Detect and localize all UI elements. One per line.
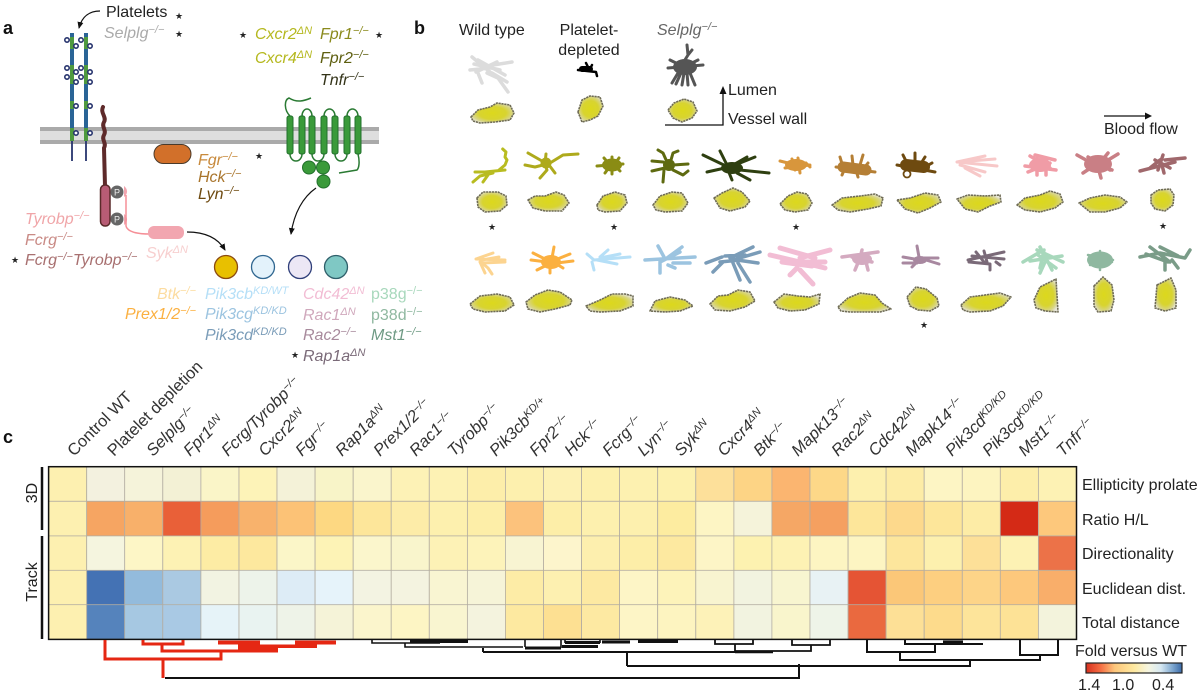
- Src family gene labels: −/−: [226, 168, 242, 180]
- column headings: Wild type: [459, 22, 525, 39]
- right row labels: Directionality: [1082, 546, 1174, 563]
- column labels: Pik3cb: [486, 412, 534, 460]
- row: total distance: [49, 605, 1076, 639]
- effector gene labels: Rac1: [303, 307, 340, 324]
- dendrogram: red cluster: [105, 640, 336, 678]
- Fc receptor gene labels: ★: [11, 256, 19, 266]
- column labels: Fpr2: [526, 423, 563, 460]
- column labels: Selplg: [143, 415, 188, 460]
- axes: lumen and vessel wall: Vessel wall: [728, 111, 807, 128]
- second row cell bodies: [477, 188, 1174, 213]
- Fc receptor gene labels: ΔN: [172, 244, 188, 256]
- colour legend: 1.0: [1112, 677, 1134, 694]
- column labels: Tnfr: [1053, 426, 1087, 460]
- GPCR gene labels: ★: [239, 31, 247, 41]
- column labels: −/−: [581, 415, 601, 435]
- GPCR gene labels: ΔN: [296, 49, 312, 61]
- column labels: −/−: [550, 411, 570, 432]
- column labels: Control WT: [64, 388, 136, 460]
- Selplg label: Selplg: [104, 25, 148, 42]
- effector gene labels: −/−: [407, 306, 422, 318]
- left group labels: 3D: [24, 483, 41, 503]
- effector gene labels: ΔN: [339, 306, 356, 318]
- GPCR gene labels: ★: [375, 31, 383, 41]
- column labels: Fcrg/Tyrobp: [218, 385, 293, 460]
- column labels: −/−: [622, 412, 643, 432]
- column labels: −/−: [310, 418, 330, 438]
- effector gene labels: −/−: [180, 305, 197, 317]
- column labels: −/−: [410, 395, 430, 415]
- column labels: −/−: [176, 403, 196, 423]
- third row cell bodies: [470, 277, 1176, 312]
- column labels: Lyn: [634, 428, 665, 460]
- receptor: Tyrobp / Fcrg chain: P: [114, 214, 120, 224]
- panel c label: c: [3, 427, 13, 447]
- significance stars: [488, 222, 1167, 331]
- column labels: ΔN: [285, 406, 305, 426]
- right row labels: [1082, 477, 1198, 632]
- column labels: Fcrg: [599, 424, 635, 460]
- column labels: Mapk13: [788, 406, 842, 460]
- Fc receptor gene labels: −/−: [74, 210, 90, 222]
- column labels: −/−: [1074, 415, 1094, 435]
- heat map grid: [49, 467, 1076, 639]
- effector gene labels: −/−: [406, 326, 422, 338]
- column labels: KD/KD: [1014, 388, 1046, 421]
- panel b label: b: [414, 18, 425, 38]
- right row labels: Ratio H/L: [1082, 512, 1149, 529]
- effector gene labels: Rac2: [303, 327, 340, 344]
- axes: lumen and vessel wall: [665, 82, 807, 128]
- column labels: Syk: [671, 428, 703, 460]
- GPCR gene labels: Cxcr2: [255, 26, 297, 43]
- GPCR gene labels: −/−: [353, 49, 369, 61]
- column labels: −/−: [433, 408, 453, 428]
- column labels: Fpr1: [180, 423, 217, 460]
- effector gene labels: Cdc42: [303, 286, 349, 303]
- Src family kinase: [154, 144, 191, 164]
- column labels: Rac1: [406, 420, 446, 460]
- GPCR gene labels: [239, 25, 383, 89]
- Fc receptor gene labels: Tyrobp: [73, 252, 122, 269]
- arrow: platelets: [79, 11, 100, 28]
- panel b: cell morphologies: [414, 18, 1190, 331]
- significance stars: ★: [1159, 222, 1167, 232]
- Fc receptor gene labels: −/−: [57, 251, 73, 263]
- row: directionality: [49, 536, 1076, 570]
- column labels: ΔN: [744, 406, 764, 426]
- Fc receptor gene labels: −/−: [122, 251, 138, 263]
- Src family gene labels: Lyn: [198, 186, 224, 203]
- column labels: ΔN: [203, 412, 223, 432]
- top row cell bodies: [471, 96, 697, 123]
- effector gene labels: Rap1a: [303, 348, 350, 365]
- arrow: Syk to effectors: [187, 232, 225, 250]
- column labels: Btk: [750, 430, 780, 460]
- column labels: KD/+: [521, 394, 548, 421]
- column headings: depleted: [558, 42, 620, 59]
- column labels: Rac2: [828, 420, 868, 460]
- colour legend: Fold versus WT: [1075, 643, 1187, 660]
- Src family gene labels: [198, 151, 263, 203]
- column labels: −/−: [280, 373, 300, 394]
- panel a: signalling diagram: [3, 4, 422, 365]
- effector gene labels: KD/KD: [253, 305, 287, 317]
- column labels: −/−: [830, 394, 850, 414]
- third row tracks: [476, 246, 1190, 284]
- axes: lumen and vessel wall: Lumen: [728, 82, 777, 99]
- receptor: Tyrobp / Fcrg chain: P: [114, 188, 120, 198]
- GPCR gene labels: Cxcr4: [255, 50, 297, 67]
- column labels: Pik3cg: [979, 412, 1027, 460]
- column labels: Fgr: [292, 430, 322, 460]
- receptor: PSGL-1 pair: [65, 33, 92, 161]
- effector gene labels: p38g: [371, 286, 407, 303]
- column headings: Platelet-: [560, 22, 618, 39]
- Src family gene labels: ★: [255, 152, 263, 162]
- Src family gene labels: Fgr: [198, 152, 222, 169]
- significance stars: ★: [792, 223, 800, 233]
- right row labels: Ellipticity prolate: [1082, 477, 1198, 494]
- column labels: −/−: [480, 400, 500, 420]
- membrane: [40, 127, 379, 144]
- column labels: Tyrobp: [444, 412, 492, 460]
- effector gene labels: Pik3cd: [205, 327, 253, 344]
- column labels: −/−: [944, 394, 964, 414]
- stars platelets: ★: [175, 30, 183, 40]
- Fc receptor gene labels: Fcrg: [25, 252, 57, 269]
- effector gene labels: KD/WT: [253, 285, 290, 297]
- GPCR gene labels: ΔN: [296, 25, 312, 37]
- effector gene labels: −/−: [180, 285, 197, 297]
- heat map border: [49, 467, 1077, 639]
- GPCR gene labels: Fpr2: [320, 50, 353, 67]
- panel c: heat map: [3, 358, 1198, 694]
- Src family gene labels: −/−: [222, 151, 238, 163]
- Fc receptor gene labels: Fcrg: [25, 232, 57, 249]
- row: euclidean distance: [49, 570, 1076, 605]
- column labels: Hck: [561, 427, 594, 460]
- Syk kinase: [148, 226, 184, 239]
- effector circles: [214, 256, 348, 278]
- platelets label: Platelets: [106, 4, 167, 21]
- effector gene labels: p38d: [371, 307, 407, 324]
- column labels: KD/KD: [977, 388, 1009, 421]
- effector gene labels: Prex1/2: [125, 306, 180, 323]
- effector gene labels: ΔN: [348, 285, 365, 297]
- arrow: GPCR to effectors: [291, 188, 316, 234]
- effector gene labels: −/−: [407, 285, 422, 297]
- column labels: −/−: [1040, 410, 1061, 430]
- blood flow arrow: Blood flow: [1104, 121, 1178, 138]
- column labels: ΔN: [855, 409, 875, 429]
- dendrogram: black clusters: [165, 640, 1058, 678]
- receptor: Tyrobp / Fcrg chain: [100, 107, 150, 234]
- column labels: Pik3cd: [942, 412, 990, 460]
- Src family gene labels: Hck: [198, 169, 226, 186]
- column labels: ΔN: [898, 402, 918, 423]
- GPCR gene labels: Fpr1: [320, 26, 353, 43]
- column headings: −/−: [701, 21, 718, 33]
- Fc receptor gene labels: Tyrobp: [25, 211, 74, 228]
- effector gene labels: ★: [291, 351, 299, 361]
- column labels: −/−: [767, 419, 787, 439]
- column headings: Selplg: [657, 22, 701, 39]
- top row tracks: [470, 45, 703, 92]
- colour legend: 1.4: [1078, 677, 1100, 694]
- effector gene labels: Mst1: [371, 327, 406, 344]
- GPCR gene labels: −/−: [348, 71, 365, 83]
- effector gene labels: Pik3cg: [205, 306, 253, 323]
- effector gene labels: KD/KD: [253, 326, 287, 338]
- Src family gene labels: −/−: [224, 185, 240, 197]
- stars platelets: ★: [175, 12, 183, 22]
- effector gene labels: ΔN: [349, 347, 366, 359]
- colour legend: 0.4: [1152, 677, 1174, 694]
- row: ratio H/L: [49, 501, 1076, 536]
- GPCR: [285, 98, 361, 188]
- Fc receptor gene labels: −/−: [57, 231, 73, 243]
- column labels: Prex1/2: [370, 407, 423, 460]
- right row labels: Total distance: [1082, 615, 1180, 632]
- blood flow arrow: [1104, 112, 1178, 138]
- column labels: Mapk14: [902, 406, 956, 460]
- second row tracks: [473, 149, 1185, 182]
- column labels: Mst1: [1015, 422, 1053, 460]
- column labels: [64, 358, 1098, 460]
- GPCR gene labels: −/−: [353, 25, 369, 37]
- effector gene labels: −/−: [340, 326, 357, 338]
- right row labels: Euclidean dist.: [1082, 581, 1186, 598]
- column labels: Cdc42: [865, 413, 912, 460]
- GPCR gene labels: Tnfr: [320, 72, 348, 89]
- Fc receptor gene labels: [11, 210, 188, 269]
- significance stars: ★: [488, 223, 496, 233]
- row: ellipticity prolate: [49, 467, 1076, 501]
- left group labels: [24, 467, 42, 639]
- significance stars: ★: [920, 321, 928, 331]
- significance stars: ★: [610, 223, 618, 233]
- effector gene labels: [125, 285, 422, 365]
- Fc receptor gene labels: Syk: [146, 245, 173, 262]
- effector gene labels: Btk: [157, 286, 180, 303]
- column labels: Rap1a: [332, 413, 379, 460]
- stars platelets: [175, 12, 183, 40]
- column labels: Cxcr2: [255, 417, 298, 460]
- column headings: [459, 21, 718, 59]
- Selplg label: −/−: [148, 24, 165, 36]
- colour legend: [1075, 643, 1187, 694]
- panel a label: a: [3, 18, 14, 38]
- column labels: ΔN: [366, 402, 386, 422]
- column labels: Cxcr4: [714, 417, 757, 460]
- column labels: Platelet depletion: [104, 358, 206, 460]
- column labels: −/−: [653, 417, 673, 437]
- column labels: ΔN: [690, 417, 710, 437]
- left group labels: Track: [24, 561, 41, 602]
- effector gene labels: Pik3cb: [205, 286, 253, 303]
